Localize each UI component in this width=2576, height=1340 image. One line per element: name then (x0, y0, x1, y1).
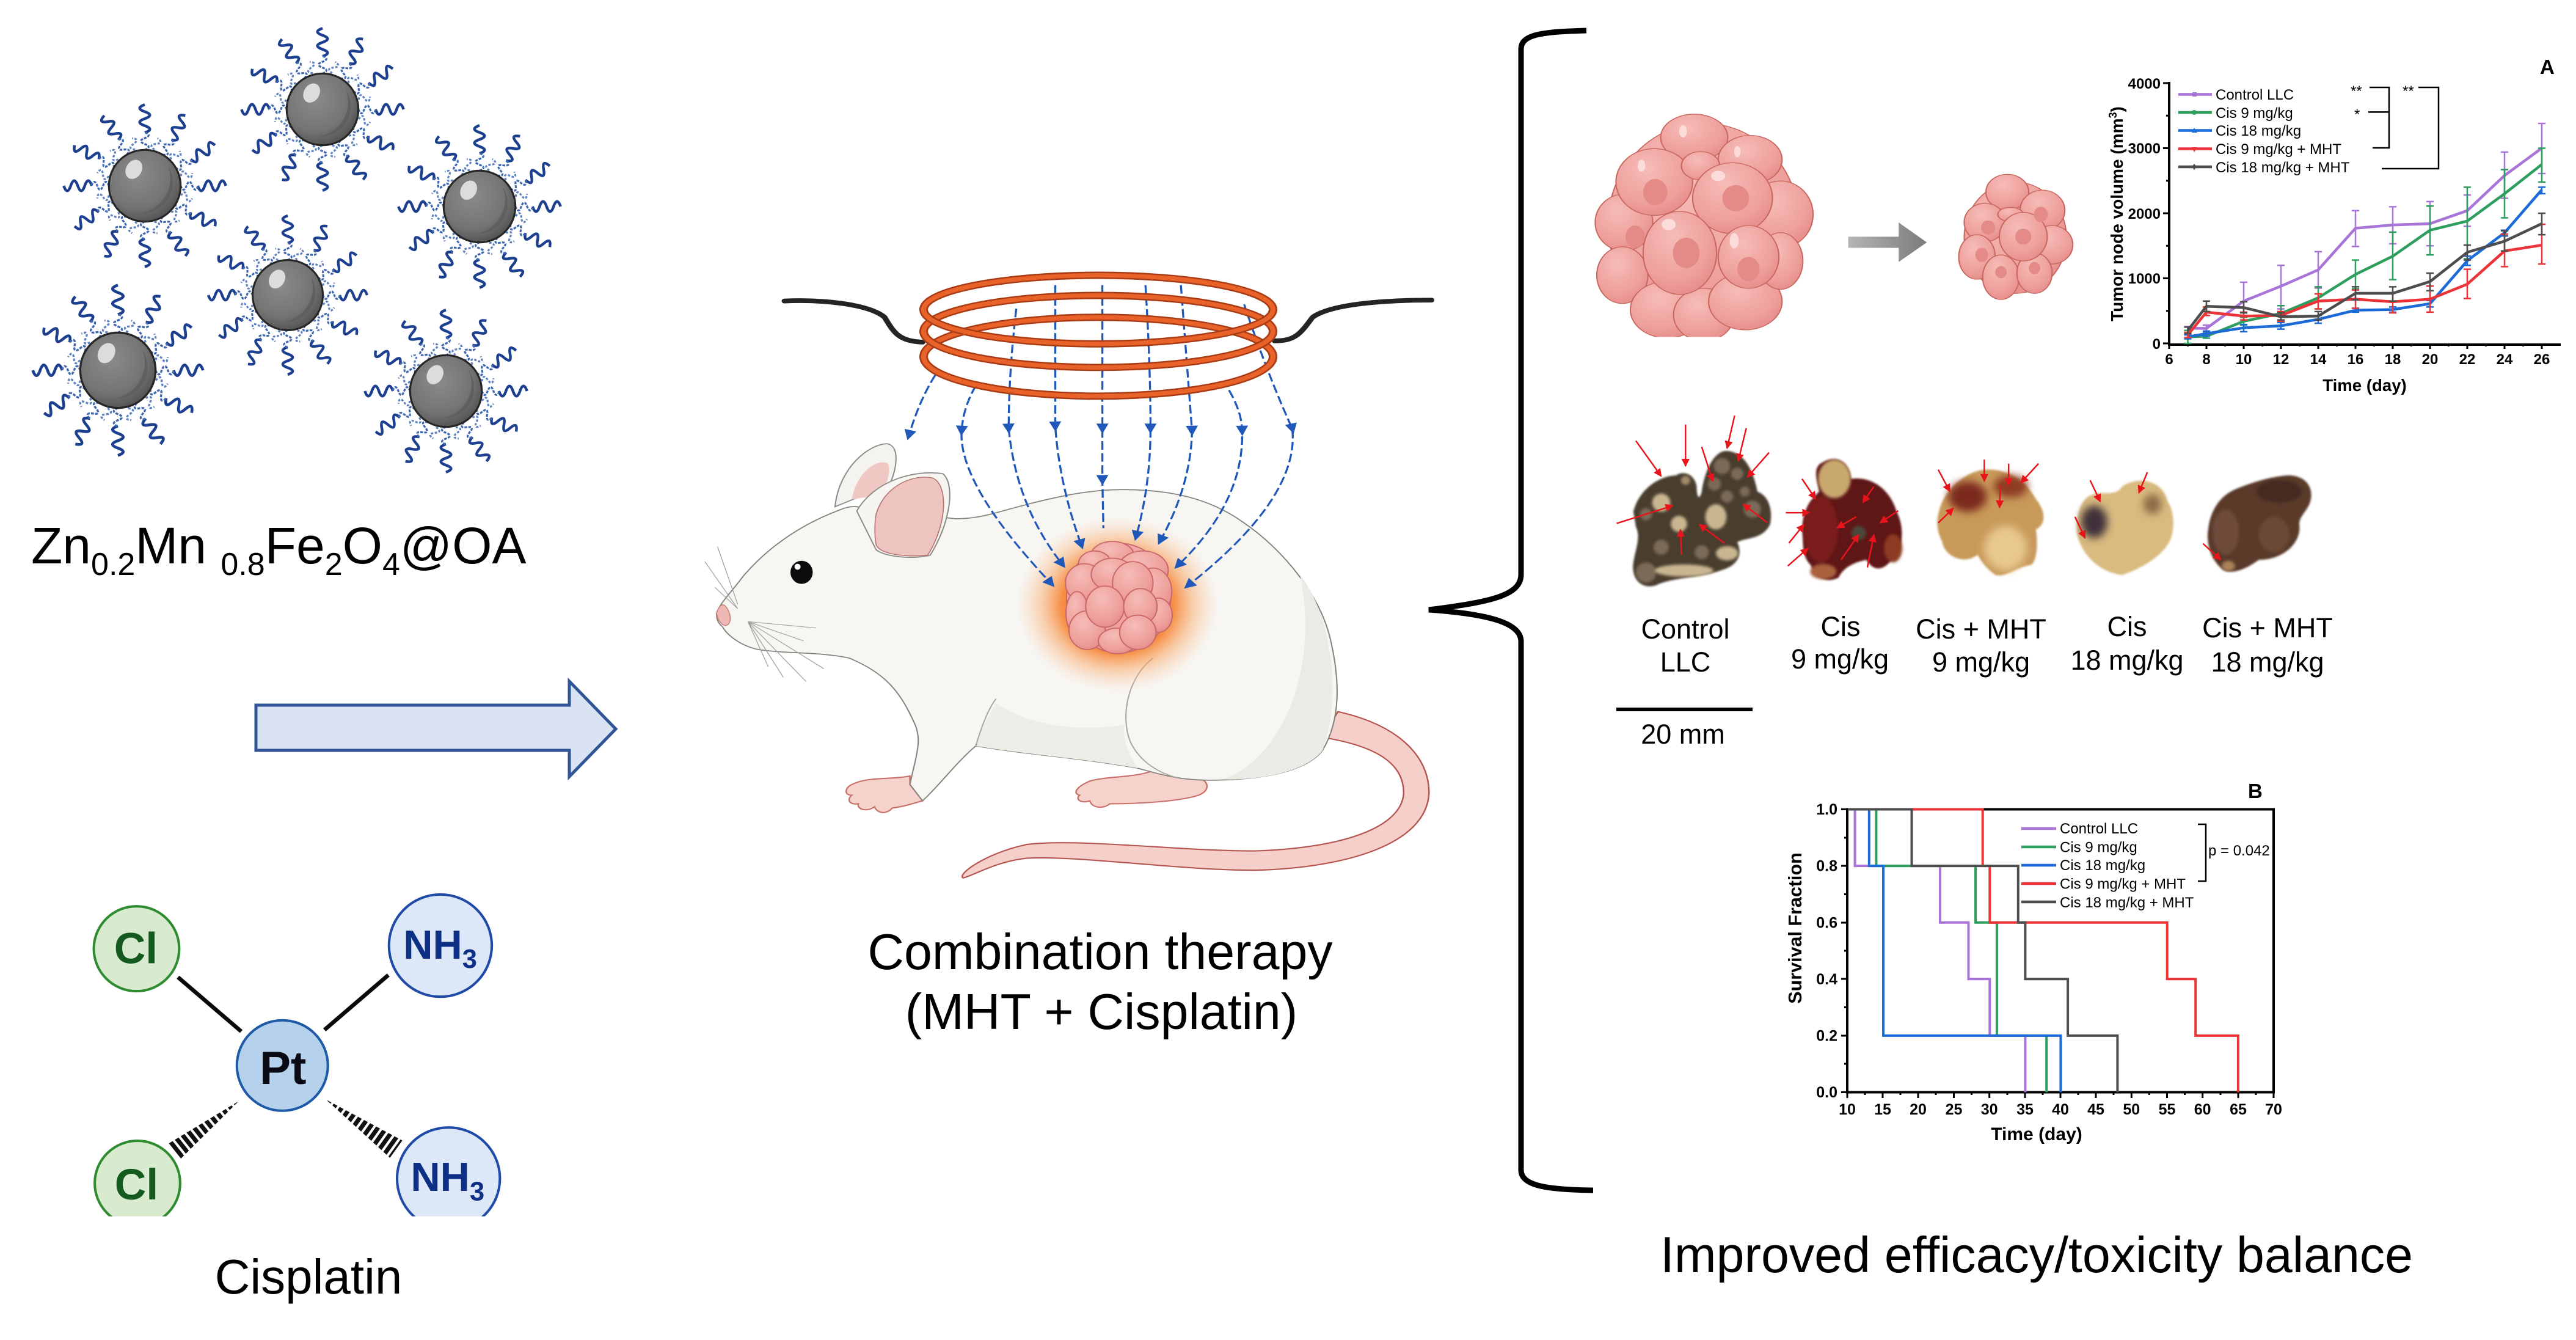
chart: tick labels B: 65 (2230, 1101, 2247, 1118)
chart: tick labels A: 10 (2236, 351, 2252, 368)
icon: cisplatin molecule: NH (403, 923, 462, 968)
chart: tick labels A: 6 (2165, 351, 2173, 368)
label: axis title y A: ) (2107, 106, 2126, 112)
chart: tick labels B: 0.8 (1816, 858, 1837, 875)
icon: mouse with tumour under coil (705, 276, 1432, 878)
chart: tick labels B: 0.0 (1816, 1084, 1837, 1101)
chart: tick labels B: 60 (2194, 1101, 2211, 1118)
panel: cisplatin (94, 895, 500, 1304)
chart: legend A: Control LLC (2216, 87, 2294, 103)
icon: Cis + MHT 9 mg/kg lung (1937, 469, 2043, 576)
icon: curly brace (1429, 31, 1593, 1190)
label: nanoparticle formula: 2 (325, 547, 343, 582)
label: group names: 18 mg/kg (2070, 645, 2184, 676)
icon: cisplatin molecule: 3 (470, 1177, 484, 1206)
chart: tick labels B: 40 (2052, 1101, 2069, 1118)
scale bar (1616, 708, 1753, 750)
label: group names: 18 mg/kg (2211, 646, 2324, 678)
chart: tick labels B: 30 (1981, 1101, 1998, 1118)
chart: tick labels B: 0.2 (1816, 1028, 1837, 1045)
icon: front ear (857, 473, 950, 557)
chart: tick labels A: 14 (2310, 351, 2327, 368)
label: group names: 9 mg/kg (1791, 643, 1889, 675)
label: nanoparticle formula: 0.8 (221, 547, 265, 582)
chart: axes A (2163, 82, 2561, 349)
panel: nanoparticles (31, 28, 561, 582)
label: nanoparticle formula: 0.2 (91, 547, 135, 582)
chart: legend B: Control LLC (2060, 821, 2138, 837)
icon: Control LLC lung (1633, 451, 1771, 587)
scale bar: 20 mm (1641, 719, 1725, 750)
chart: tick labels A: 26 (2534, 351, 2550, 368)
label: group names: LLC (1660, 646, 1710, 678)
icon: tumour photos with red arrows (1617, 416, 2311, 587)
icon: magnetic field lines (909, 285, 1293, 585)
icon: Cis + MHT 18 mg/kg lung (2208, 475, 2311, 572)
label: combination therapy: Combination therapy (867, 924, 1333, 980)
icon: mouse tail (962, 712, 1429, 878)
chart: tick labels B: 20 (1910, 1101, 1927, 1118)
callout: p value bracket: p = 0.042 (2208, 843, 2270, 859)
chart: tick labels B: 50 (2123, 1101, 2140, 1118)
chart: tick labels B: 10 (1839, 1101, 1856, 1118)
chart: step curves B (1848, 809, 2238, 1093)
label: nanoparticle formula: Zn (31, 517, 91, 574)
label: axis title x A: Time (day) (2322, 376, 2407, 395)
chart: legend B: Cis 18 mg/kg + MHT (2060, 895, 2194, 911)
label: axis title y A: 3 (2107, 112, 2119, 118)
icon: back ear (835, 444, 896, 507)
label: nanoparticle formula: O (343, 517, 382, 574)
callout: p value bracket (2198, 824, 2270, 881)
chart: tick labels B: 45 (2087, 1101, 2104, 1118)
icon: copper coil (924, 276, 1273, 396)
icon: nose (717, 605, 730, 626)
chart: significance brackets A: ** (2403, 83, 2414, 100)
label: axis title y A: Tumor node volume (mm (2107, 118, 2126, 321)
label: nanoparticle formula: @OA (400, 517, 527, 574)
icon: large tumour (1595, 114, 1813, 341)
chart: tick labels A: 16 (2348, 351, 2363, 368)
icon: mouse paws (846, 771, 1207, 813)
chart: legend B: Cis 9 mg/kg (2060, 840, 2137, 855)
icon: Cis 18 mg/kg lung (2076, 481, 2173, 575)
label: nanoparticle formula: 4 (382, 547, 400, 582)
icon: small tumour (1959, 174, 2073, 299)
icon: cisplatin molecule: NH (410, 1155, 470, 1200)
chart: tick labels A: 12 (2273, 351, 2289, 368)
chart: data lines A (2184, 123, 2545, 343)
chart: tick labels B: 70 (2265, 1101, 2282, 1118)
chart: tick labels A: 4000 (2128, 76, 2161, 92)
icon: cisplatin molecule: Cl (114, 925, 158, 973)
label: nanoparticle formula: Mn (135, 517, 221, 574)
label: nanoparticle formula: Fe (265, 517, 325, 574)
chart: tick labels A: 0 (2153, 336, 2161, 353)
panel: chart B survival (1785, 780, 2282, 1144)
arrow: blue block arrow to the mouse (256, 681, 616, 777)
icon: cisplatin molecule: Cl (115, 1161, 158, 1209)
chart: tick labels B: 25 (1946, 1101, 1962, 1118)
chart: legend B: Cis 9 mg/kg + MHT (2060, 876, 2186, 892)
icon: cisplatin molecule (94, 895, 500, 1229)
chart: tick labels A: 3000 (2128, 141, 2161, 157)
icon: mouse body (717, 489, 1337, 801)
label: A: A (2540, 56, 2555, 78)
label: group names: Control (1641, 613, 1730, 645)
chart: significance brackets A (2351, 83, 2439, 169)
label: group names: 9 mg/kg (1932, 646, 2030, 678)
label: group names: Cis + MHT (2202, 612, 2333, 643)
chart: tick labels B: 1.0 (1816, 801, 1837, 818)
chart: significance brackets A: ** (2351, 83, 2362, 100)
chart: significance brackets A: * (2354, 106, 2360, 123)
chart: tick labels A (2128, 76, 2550, 368)
panel: excised lung photos (1616, 416, 2333, 750)
chart: tick labels A: 24 (2497, 351, 2513, 368)
icon: Cis 9 mg/kg lung (1803, 459, 1902, 580)
chart: tick labels A: 1000 (2128, 271, 2161, 287)
label: combination therapy: (MHT + Cisplatin) (905, 984, 1297, 1040)
chart: legend A: Cis 18 mg/kg (2216, 123, 2301, 139)
chart: legend B (2021, 821, 2194, 911)
chart: tick labels A: 2000 (2128, 206, 2161, 222)
label: B: B (2248, 780, 2263, 802)
label: group names: Cis + MHT (1916, 613, 2046, 645)
icon: tumour shrinking (1595, 114, 2073, 341)
icon: heat glow (1016, 516, 1219, 692)
icon: coil wires (784, 300, 1432, 342)
chart: tick labels B: 15 (1874, 1101, 1891, 1118)
chart: tick labels B: 35 (2016, 1101, 2034, 1118)
chart: tick labels A: 18 (2385, 351, 2401, 368)
chart: tick labels B: 0.4 (1816, 971, 1837, 988)
icon: cisplatin molecule: 3 (462, 945, 477, 974)
arrow: tumour pointers (1617, 416, 2221, 568)
panel: mouse and magnetic coil (705, 276, 1432, 1040)
label: conclusion: Improved efficacy/toxicity balance (1660, 1227, 2413, 1283)
label: group names: Cis (2107, 611, 2147, 642)
label: group names: Cis (1820, 611, 1861, 642)
arrow: grey shrink arrow (1848, 222, 1927, 262)
chart: legend B: Cis 18 mg/kg (2060, 857, 2145, 874)
chart: legend A (2178, 87, 2350, 176)
panel: chart A tumor node volume (2107, 56, 2561, 395)
label: axis title x B: Time (day) (1991, 1124, 2082, 1144)
icon: tumour (1065, 541, 1172, 654)
chart: tick labels B: 0.6 (1816, 914, 1837, 931)
icon: oleic-acid coated nanoparticle cluster (33, 28, 561, 472)
icon: cisplatin molecule: Pt (260, 1042, 307, 1094)
label: axis title y B: Survival Fraction (1785, 852, 1806, 1004)
chart: tick labels A: 22 (2459, 351, 2475, 368)
label: Cisplatin: Cisplatin (215, 1250, 402, 1304)
chart: tick labels B (1816, 801, 2282, 1118)
icon: eye (790, 561, 812, 584)
chart: legend A: Cis 18 mg/kg + MHT (2216, 159, 2350, 176)
chart: tick labels A: 20 (2422, 351, 2438, 368)
chart: legend A: Cis 9 mg/kg (2216, 105, 2293, 122)
label: group names (1641, 611, 2333, 678)
chart: tick labels A: 8 (2202, 351, 2211, 368)
chart: axes B (1841, 809, 2274, 1098)
icon: whiskers (705, 547, 824, 682)
chart: legend A: Cis 9 mg/kg + MHT (2216, 141, 2341, 158)
chart: tick labels B: 55 (2159, 1101, 2175, 1118)
